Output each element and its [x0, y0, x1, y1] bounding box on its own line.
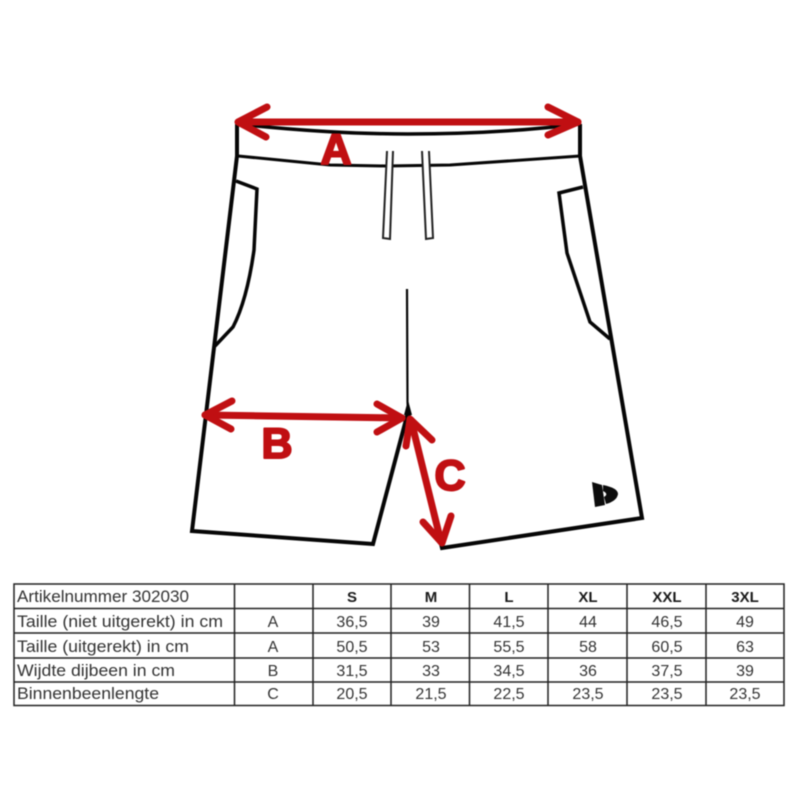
- table row: thigh width: 36: [579, 663, 597, 680]
- arrow: B thigh width: [205, 401, 402, 432]
- waistband top edge: [237, 124, 580, 134]
- label: A: A: [320, 126, 352, 174]
- table row: inseam: 22,5: [493, 686, 525, 703]
- table row: thigh width: 37,5: [651, 663, 683, 680]
- table row: waist unstretched: 39: [422, 614, 440, 631]
- table row: header: L: [504, 589, 514, 606]
- table row: inseam: C: [267, 686, 279, 703]
- table row: header: M: [425, 589, 437, 606]
- table row: waist stretched: 50,5: [336, 639, 368, 656]
- table row: header: Artikelnummer 302030: [17, 588, 189, 606]
- table row: inseam: 23,5: [651, 686, 683, 703]
- table row: header: XXL: [652, 589, 682, 606]
- table row: inseam: 20,5: [336, 686, 368, 703]
- table row: waist stretched: 55,5: [493, 639, 525, 656]
- table row: inseam: [17, 685, 761, 703]
- table row: thigh width: [17, 662, 754, 680]
- table row: waist unstretched: 36,5: [336, 614, 368, 631]
- centre seam: [407, 289, 408, 416]
- table row: thigh width: 33: [422, 663, 440, 680]
- arrow: A waist width: [238, 107, 578, 137]
- table row: thigh width: 31,5: [336, 663, 368, 680]
- waistband bottom edge: [238, 156, 580, 166]
- table row: header: S: [347, 589, 357, 606]
- shorts outline drawing: [192, 124, 642, 548]
- table row: waist stretched: 63: [736, 639, 754, 656]
- table row: inseam: 23,5: [729, 686, 761, 703]
- table row: waist unstretched: 49: [736, 614, 754, 631]
- label: C: C: [434, 452, 466, 500]
- table row: waist unstretched: 44: [579, 614, 597, 631]
- table row: header: [17, 588, 759, 606]
- table grid: [14, 584, 784, 706]
- table row: waist unstretched: Taille (niet uitgerekt) in cm: [17, 613, 223, 631]
- crotch join: [404, 400, 412, 415]
- table row: waist unstretched: [17, 613, 754, 631]
- table row: thigh width: 34,5: [493, 663, 525, 680]
- table row: waist stretched: Taille (uitgerekt) in cm: [17, 638, 189, 656]
- table row: inseam: 21,5: [415, 686, 447, 703]
- table row: thigh width: 39: [736, 663, 754, 680]
- table row: waist stretched: 53: [422, 639, 440, 656]
- table row: waist unstretched: 41,5: [493, 614, 525, 631]
- size table: [14, 584, 784, 706]
- icon: brand logo: [592, 482, 618, 507]
- table row: waist unstretched: A: [268, 614, 279, 631]
- arrow: C inseam length: [406, 419, 451, 543]
- shorts body outline: [192, 124, 642, 548]
- right drawstring: [422, 151, 433, 239]
- label: B: B: [261, 420, 293, 468]
- table row: inseam: Binnenbeenlengte: [17, 685, 159, 703]
- right pocket: [559, 187, 610, 339]
- table row: thigh width: Wijdte dijbeen in cm: [17, 662, 175, 680]
- table row: thigh width: B: [268, 663, 278, 680]
- table row: header: 3XL: [731, 589, 759, 606]
- table row: waist stretched: A: [268, 639, 279, 656]
- table row: waist stretched: 58: [579, 639, 597, 656]
- table row: waist stretched: [17, 638, 754, 656]
- table row: waist unstretched: 46,5: [651, 614, 683, 631]
- table row: header: XL: [578, 589, 598, 606]
- table row: inseam: 23,5: [572, 686, 604, 703]
- left pocket: [215, 181, 257, 346]
- left drawstring: [383, 151, 393, 239]
- table row: waist stretched: 60,5: [651, 639, 683, 656]
